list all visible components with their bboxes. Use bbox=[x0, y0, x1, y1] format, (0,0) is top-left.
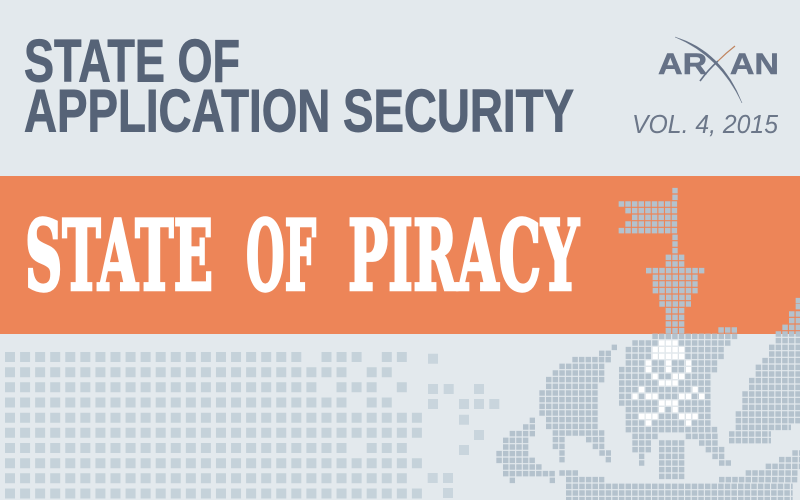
banner title: state of piracy bbox=[25, 200, 580, 312]
heading: state of application security bbox=[24, 28, 574, 144]
hull bbox=[559, 453, 800, 500]
main sail bbox=[619, 336, 738, 476]
pixel world map bbox=[5, 354, 499, 498]
heading: state of application security: APPLICATION SECURITY bbox=[24, 78, 574, 144]
small fore sail bbox=[496, 420, 555, 480]
pixel pirate ship bbox=[496, 191, 800, 500]
logo: Arxan bbox=[658, 37, 779, 103]
heading: state of application security: STATE OF bbox=[24, 28, 240, 94]
volume label: VOL. 4, 2015 bbox=[632, 109, 779, 139]
banner title: state of piracy: STATE bbox=[25, 200, 213, 312]
banner title: state of piracy: PIRACY bbox=[348, 200, 580, 312]
skull and crossbones bbox=[632, 343, 704, 423]
orange banner bbox=[0, 176, 800, 334]
left sail bbox=[539, 347, 617, 460]
flag and mast bbox=[619, 191, 737, 331]
banner title: state of piracy: OF bbox=[246, 200, 316, 312]
logo: Arxan: ARXAN bbox=[658, 48, 779, 81]
right sail bbox=[729, 301, 800, 441]
